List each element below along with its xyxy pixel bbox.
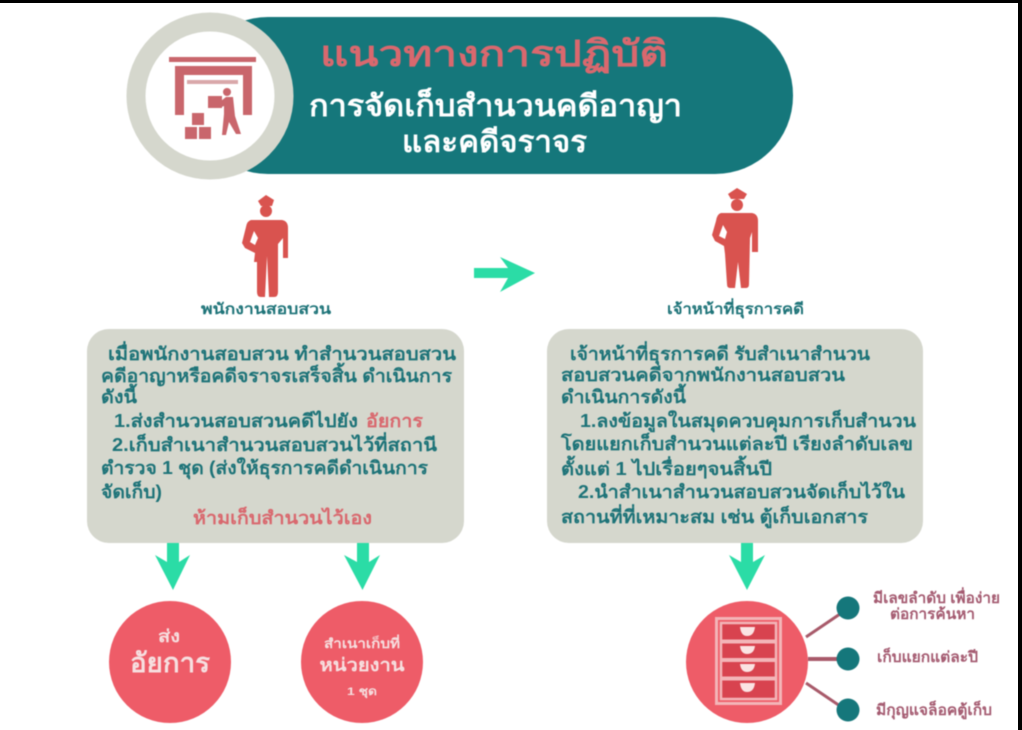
text block: investigator steps: จัดเก็บ) [101, 480, 162, 502]
text block: investigator steps: อัยการ [366, 411, 423, 431]
title: แนวทางการปฏิบัติ [320, 33, 668, 74]
subtitle line 1: การจัดเก็บสำนวนคดีอาญา [309, 87, 682, 124]
dot: locked [836, 698, 860, 722]
text block: investigator steps: ห้ามเก็บสำนวนไว้เอง [193, 506, 372, 528]
arrow: down to cabinet [729, 543, 765, 590]
dot: by year [836, 648, 860, 670]
figure: investigator [201, 195, 332, 318]
arrow: down to unit copy [344, 543, 380, 590]
arrow: down to prosecutor [155, 543, 190, 590]
text block: investigator steps: เมื่อพนักงานสอบสวน ทำสำนวนสอบสวน [108, 341, 457, 364]
circle: send to prosecutor: อัยการ [130, 648, 211, 678]
icon: clerk officer [712, 188, 758, 288]
text block: investigator steps: ตำรวจ 1 ชุด (ส่งให้ธุรการคดีดำเนินการ [101, 457, 428, 480]
label: numbered for searching: มีเลขลำดับ เพื่อง่าย [873, 587, 1000, 607]
circle: copy kept at unit: 1 ชุด [347, 686, 377, 699]
text block: clerk steps: ตั้งแต่ 1 ไปเรื่อยๆจนสิ้นปี [561, 455, 772, 479]
text block: clerk steps [560, 341, 917, 529]
label: พนักงานสอบสวน [201, 301, 332, 318]
label: numbered for searching [873, 587, 1000, 623]
label: เจ้าหน้าที่ธุรการคดี [667, 298, 804, 319]
icon: warehouse worker badge [136, 22, 284, 170]
icon: officer [242, 195, 288, 297]
arrow: officer to clerk [474, 257, 535, 292]
header banner [136, 17, 793, 174]
circle: filing cabinet [686, 601, 808, 723]
circle: send to prosecutor [109, 601, 231, 723]
label: locked cabinet: มีกุญแจล็อคตู้เก็บ [876, 700, 992, 720]
dot: numbered [836, 596, 860, 620]
panel: clerk duties [547, 329, 923, 543]
panel: investigator duties [87, 329, 464, 543]
text block: investigator steps: ดังนี้ [101, 383, 138, 407]
label: separated by year: เก็บแยกแต่ละปี [877, 647, 978, 666]
circle: copy kept at unit [301, 601, 423, 723]
label: numbered for searching: ต่อการค้นหา [890, 606, 975, 623]
text block: clerk steps: 1.ลงข้อมูลในสมุดควบคุมการเก็บสำนวน [580, 409, 917, 433]
text block: clerk steps: โดยแยกเก็บสำนวนแต่ละปี เรียงลำดับเลข [560, 432, 913, 454]
text block: investigator steps [101, 341, 457, 528]
connector lines [806, 614, 840, 706]
text block: clerk steps: สอบสวนคดีจากพนักงานสอบสวน [561, 365, 846, 385]
text block: clerk steps: เจ้าหน้าที่ธุรการคดี รับสำเนาสำนวน [570, 341, 871, 366]
icon: cabinet [716, 618, 780, 704]
text block: clerk steps: สถานที่ที่เหมาะสม เช่น ตู้เก็บเอกสาร [561, 504, 868, 529]
text block: investigator steps: คดีอาญาหรือคดีจราจรเสร็จสิ้น ดำเนินการ [101, 362, 452, 387]
text block: investigator steps: 1.ส่งสำนวนสอบสวนคดีไปยัง [114, 410, 358, 431]
circle: send to prosecutor: ส่ง [158, 627, 180, 646]
text block: clerk steps: ดำเนินการดังนี้ [561, 383, 687, 407]
figure: case clerk [667, 188, 804, 319]
subtitle line 2: และคดีจราจร [402, 126, 587, 159]
banner pill [190, 17, 793, 174]
text block: investigator steps: 2.เก็บสำเนาสำนวนสอบสวนไว้ที่สถานี [112, 432, 438, 455]
text block: clerk steps: 2.นำสำเนาสำนวนสอบสวนจัดเก็บไว้ใน [578, 480, 906, 502]
circle: copy kept at unit: หน่วยงาน [320, 655, 405, 675]
circle: copy kept at unit: สำเนาเก็บที่ [324, 634, 400, 651]
